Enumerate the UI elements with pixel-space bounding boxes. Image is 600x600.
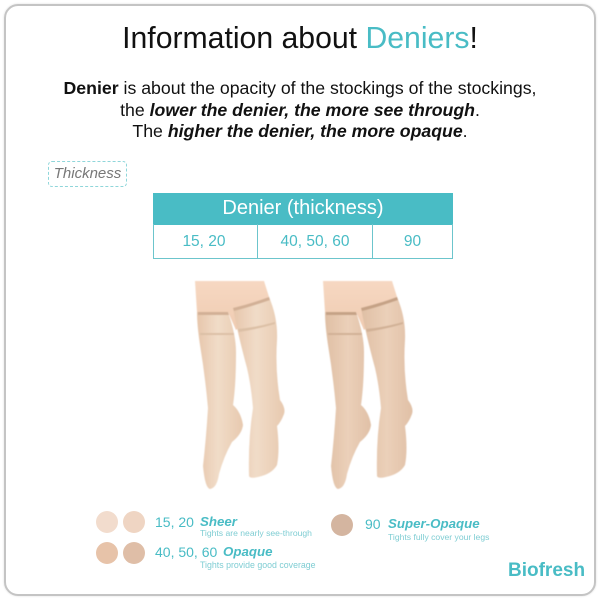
swatch: super-opaque [331, 514, 353, 536]
table header [153, 193, 453, 225]
opaque range: 40, 50, 60 [155, 544, 217, 560]
table header: Denier (thickness) [222, 197, 384, 219]
super-opaque label: Super-Opaque [388, 516, 480, 531]
legs: sheer pair [195, 281, 284, 489]
cell: 15, 20: 15, 20 [182, 233, 226, 250]
super-opaque description: Tights fully cover your legs [388, 532, 489, 542]
intro text: Denier is about the opacity of the stockings of the stockings, [64, 78, 536, 98]
swatch: opaque medium [123, 542, 145, 564]
legend: sheer [155, 514, 312, 538]
intro text: The higher the denier, the more opaque. [132, 121, 468, 141]
legs: opaque pair [323, 281, 412, 489]
legend: opaque [155, 544, 316, 570]
tag: thickness [48, 161, 127, 187]
sheer range: 15, 20 [155, 514, 194, 530]
super-opaque range: 90 [365, 516, 381, 532]
swatch: sheer light [96, 511, 118, 533]
table row [153, 224, 453, 259]
logo: Biofresh: Biofresh [508, 560, 585, 581]
sheer label: Sheer [200, 514, 237, 529]
cell divider and 40, 50, 60: 40, 50, 60 [281, 233, 349, 250]
intro text: the lower the denier, the more see through. [120, 100, 480, 120]
intro text [64, 78, 536, 141]
legend: super-opaque [365, 516, 490, 542]
opaque description: Tights provide good coverage [200, 560, 316, 570]
table: denier thickness [153, 193, 453, 259]
cell: 90: 90 [404, 233, 421, 250]
swatch: sheer medium [123, 511, 145, 533]
opaque label: Opaque [223, 544, 272, 559]
sheer description: Tights are nearly see-through [200, 528, 312, 538]
cell divider and 40, 50, 60 [257, 224, 373, 258]
title: Information about Deniers! [122, 22, 478, 55]
swatch: opaque light [96, 542, 118, 564]
tag: thickness: Thickness [54, 165, 121, 182]
